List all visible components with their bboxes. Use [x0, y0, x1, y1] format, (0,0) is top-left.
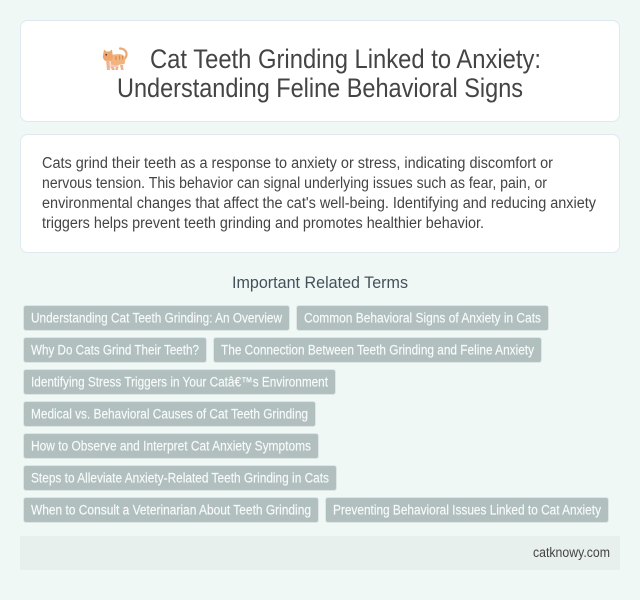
- tag: stress triggers: [24, 370, 336, 394]
- panel: description: [20, 134, 620, 252]
- title: Cat Teeth Grinding Linked to Anxiety:: [150, 44, 541, 74]
- tag: why cats grind: [24, 338, 206, 362]
- tag: why cats grind: Why Do Cats Grind Their Teeth?: [31, 342, 199, 358]
- tag: steps to alleviate: [24, 466, 336, 490]
- tag: overview: Understanding Cat Teeth Grinding: An Overview: [31, 310, 282, 326]
- footer: catknowy.com: [533, 545, 610, 560]
- tag: common signs: Common Behavioral Signs of Anxiety in Cats: [304, 310, 541, 326]
- tag: medical vs behavioral: [24, 402, 316, 426]
- tag: preventing issues: [326, 498, 608, 522]
- text block: description: [42, 155, 596, 232]
- panel: title card: [20, 20, 620, 122]
- text block: description: Cats grind their teeth as a response to anxiety or stress, indicating discomfort or: [42, 155, 553, 172]
- tag: consult veterinarian: When to Consult a Veterinarian About Teeth Grinding: [31, 502, 311, 518]
- title: [117, 44, 541, 103]
- tag: consult veterinarian: [24, 498, 318, 522]
- text block: description: triggers helps prevent teeth grinding and promotes healthier behavior.: [42, 215, 484, 232]
- tag: preventing issues: Preventing Behavioral Issues Linked to Cat Anxiety: [333, 502, 601, 518]
- tag: connection: [214, 338, 542, 362]
- tag: medical vs behavioral: Medical vs. Behavioral Causes of Cat Teeth Grinding: [31, 406, 308, 422]
- tag: observe symptoms: How to Observe and Interpret Cat Anxiety Symptoms: [31, 438, 311, 454]
- text block: description: environmental changes that affect the cat's well-being. Identifying and reducing anxiety: [42, 195, 596, 212]
- tag: steps to alleviate: Steps to Alleviate Anxiety-Related Teeth Grinding in Cats: [31, 470, 329, 486]
- text block: description: nervous tension. This behavior can signal underlying issues such as fear, pain, or: [42, 175, 547, 192]
- heading: related terms: Important Related Terms: [232, 274, 408, 292]
- tag: connection: The Connection Between Teeth Grinding and Feline Anxiety: [221, 342, 534, 358]
- tag: observe symptoms: [24, 434, 318, 458]
- footer: [20, 536, 620, 570]
- tag: common signs: [296, 306, 548, 330]
- tag: stress triggers: Identifying Stress Triggers in Your Catâ€™s Environment: [31, 374, 328, 390]
- title: Understanding Feline Behavioral Signs: [117, 73, 523, 103]
- tag: overview: [24, 306, 290, 330]
- icon: cat: [103, 48, 127, 70]
